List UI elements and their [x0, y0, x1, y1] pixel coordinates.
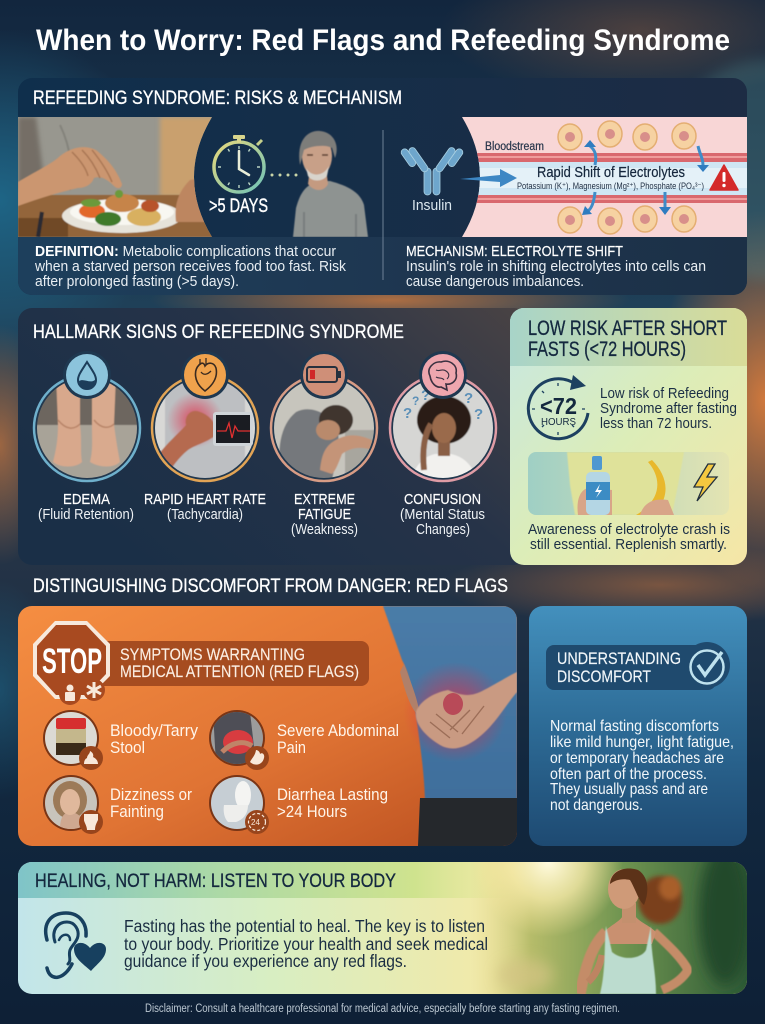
- title: When to Worry: Red Flags and Refeeding Syndrome: [36, 24, 730, 57]
- text: normal fasting discomforts: They usually pass and are: [550, 781, 708, 798]
- icon: 72 hour clock: <72: [540, 393, 577, 419]
- item: severe abdominal pain: Pain: [277, 739, 306, 757]
- label: rapid heart rate: RAPID HEART RATE: [144, 491, 266, 508]
- heading badge: [546, 642, 730, 690]
- heading: FASTS (<72 HOURS): [528, 338, 686, 361]
- item: diarrhea lasting over 24 hours: Diarrhea Lasting: [277, 786, 388, 804]
- item: diarrhea lasting over 24 hours: [209, 775, 388, 834]
- text: mechanism: [406, 243, 706, 290]
- text: awareness: Awareness of electrolyte crash is: [528, 521, 730, 538]
- panel: low risk after short fasts: [510, 308, 747, 565]
- text: awareness: still essential. Replenish smartly.: [530, 536, 727, 553]
- icon: ear and heart: [46, 913, 106, 977]
- photo: frail older man: [293, 131, 368, 237]
- label: confusion: CONFUSION: [404, 491, 481, 508]
- panel: red flag symptoms: [18, 606, 517, 846]
- icon: small medical badges: [59, 679, 105, 705]
- heading: distinguishing discomfort from danger: DISTINGUISHING DISCOMFORT FROM DANGER: RED FLAGS: [33, 576, 508, 597]
- text: mechanism: cause dangerous imbalances.: [406, 273, 584, 290]
- text: mechanism: Insulin's role in shifting electrolytes into cells can: [406, 258, 706, 275]
- cells: [558, 121, 696, 234]
- text: listen to your body: to your body. Prioritize your health and seek medical: [124, 934, 488, 954]
- definition and mechanism background: [18, 237, 747, 295]
- item: severe abdominal pain: Severe Abdominal: [277, 722, 399, 740]
- heading: [528, 317, 727, 361]
- icon: heart: [181, 351, 229, 399]
- text: normal fasting discomforts: [550, 718, 734, 814]
- text: definition: when a starved person receives food too fast. Risk: [34, 258, 346, 275]
- label: extreme fatigue: (Weakness): [291, 521, 358, 538]
- hair: [638, 876, 682, 924]
- text: normal fasting discomforts: not dangerous.: [550, 797, 643, 814]
- label: electrolytes list: Potassium (K⁺), Magnesium (Mg²⁺), Phosphate (PO₄³⁻): [517, 181, 704, 191]
- item: severe abdominal pain: [209, 710, 399, 770]
- text: definition: after prolonged fasting (>5 days).: [35, 273, 239, 290]
- item: dizziness or fainting: Dizziness or: [110, 786, 192, 804]
- text: normal fasting discomforts: or temporary headaches are: [550, 750, 724, 767]
- icon: warning triangle: [710, 165, 738, 190]
- label: extreme fatigue: EXTREME: [294, 491, 355, 508]
- icon: stopwatch: [214, 135, 264, 192]
- label: edema: EDEMA: [63, 491, 110, 508]
- question marks: ?: [403, 405, 412, 422]
- head: [622, 903, 636, 917]
- item: diarrhea lasting over 24 hours: 24: [251, 818, 260, 827]
- arms: [580, 932, 606, 994]
- text: low risk: Syndrome after fasting: [600, 400, 737, 417]
- label: edema: (Fluid Retention): [38, 506, 134, 523]
- text: low risk: less than 72 hours.: [600, 415, 712, 432]
- dots: [270, 174, 298, 176]
- text: definition: DEFINITION: Metabolic complications that occur: [35, 243, 336, 260]
- photo: water bottle and banana: [528, 452, 729, 515]
- text: listen to your body: Fasting has the potential to heal. The key is to listen: [124, 916, 485, 936]
- icon: 72 hour clock: HOURS: [541, 417, 576, 428]
- icon: check mark: [690, 650, 724, 684]
- question marks: ?: [412, 394, 419, 408]
- label: confusion: [400, 491, 485, 538]
- item: dizziness or fainting: [43, 775, 192, 834]
- label: bloodstream: Bloodstream: [485, 141, 544, 153]
- question marks: ?: [474, 406, 483, 423]
- text: definition: [34, 243, 346, 290]
- label: extreme fatigue: FATIGUE: [298, 506, 351, 523]
- question marks: ?: [421, 387, 430, 404]
- icon: 72 hour clock: [528, 375, 588, 439]
- label: edema: [38, 491, 134, 523]
- icon: insulin antibody: [400, 146, 464, 195]
- icon: water drop: [63, 351, 111, 399]
- photo: woman running in sunlit forest: [483, 862, 747, 994]
- heading badge: UNDERSTANDING: [557, 650, 681, 668]
- photo: man holding stomach: [383, 606, 517, 846]
- item: bloody tarry stool: [43, 710, 199, 770]
- text: low risk: [600, 385, 737, 432]
- icon: brain: [419, 351, 467, 399]
- text: low risk: Low risk of Refeeding: [600, 385, 729, 402]
- text: mechanism: MECHANISM: ELECTROLYTE SHIFT: [406, 243, 623, 260]
- header band: [510, 308, 747, 366]
- sign: confusion: [390, 375, 496, 481]
- text: normal fasting discomforts: often part of the process.: [550, 766, 707, 783]
- item: dizziness or fainting: Fainting: [110, 803, 164, 821]
- text: normal fasting discomforts: Normal fasting discomforts: [550, 718, 719, 735]
- text: listen to your body: guidance if you experience any red flags.: [124, 951, 407, 971]
- label: confusion: Changes): [416, 521, 470, 538]
- heading band: symptoms warranting medical attention: MEDICAL ATTENTION (RED FLAGS): [120, 662, 359, 681]
- panel: refeeding syndrome risks and mechanism: [18, 78, 747, 295]
- icon: stop sign: STOP: [42, 642, 102, 681]
- shift arrows: [588, 146, 703, 211]
- text: listen to your body: [124, 916, 488, 971]
- diagram: bloodstream electrolyte shift: [462, 117, 747, 237]
- disclaimer: Disclaimer: Consult a healthcare professional for medical advice, especially before starting any fasting regimen.: [145, 1003, 620, 1015]
- heading badge: DISCOMFORT: [557, 668, 651, 686]
- photo: person eating a plate of food: [18, 117, 220, 237]
- text: awareness: [528, 521, 730, 553]
- sign: rapid heart rate: [152, 375, 258, 481]
- heading band: symptoms warranting medical attention: [92, 641, 369, 686]
- sign: extreme fatigue: [271, 375, 377, 481]
- label: rapid heart rate: [144, 491, 266, 523]
- arrow: insulin to bloodstream: [460, 169, 517, 187]
- heading band: symptoms warranting medical attention: SYMPTOMS WARRANTING: [120, 645, 305, 664]
- item: diarrhea lasting over 24 hours: >24 Hours: [277, 803, 347, 821]
- label: insulin: Insulin: [412, 197, 452, 214]
- panel: hallmark signs: [18, 308, 528, 565]
- label: rapid shift of electrolytes: Rapid Shift of Electrolytes: [537, 164, 685, 181]
- sign: edema: [34, 375, 140, 481]
- monitor: [213, 412, 253, 446]
- icon: low battery: [300, 351, 348, 399]
- label: extreme fatigue: [291, 491, 358, 538]
- item: bloody tarry stool: Bloody/Tarry: [110, 722, 199, 740]
- panel: understanding discomfort: [529, 606, 747, 846]
- question marks: ?: [464, 390, 473, 407]
- label: more than five days: >5 DAYS: [209, 196, 268, 217]
- panel: healing not harm: [18, 862, 747, 994]
- heading: healing not harm: HEALING, NOT HARM: LISTEN TO YOUR BODY: [35, 871, 396, 892]
- heading: hallmark signs: HALLMARK SIGNS OF REFEEDING SYNDROME: [33, 322, 404, 343]
- item: bloody tarry stool: Stool: [110, 739, 145, 757]
- icon: stop sign: [33, 621, 110, 699]
- label: rapid heart rate: (Tachycardia): [167, 506, 243, 523]
- shoulders: [604, 917, 656, 944]
- question marks: [403, 387, 483, 423]
- divider: [382, 130, 384, 280]
- label: confusion: (Mental Status: [400, 506, 485, 523]
- text: normal fasting discomforts: like mild hunger, light fatigue,: [550, 734, 734, 751]
- tank top: [600, 926, 656, 994]
- panel heading: REFEEDING SYNDROME: RISKS & MECHANISM: [33, 88, 402, 109]
